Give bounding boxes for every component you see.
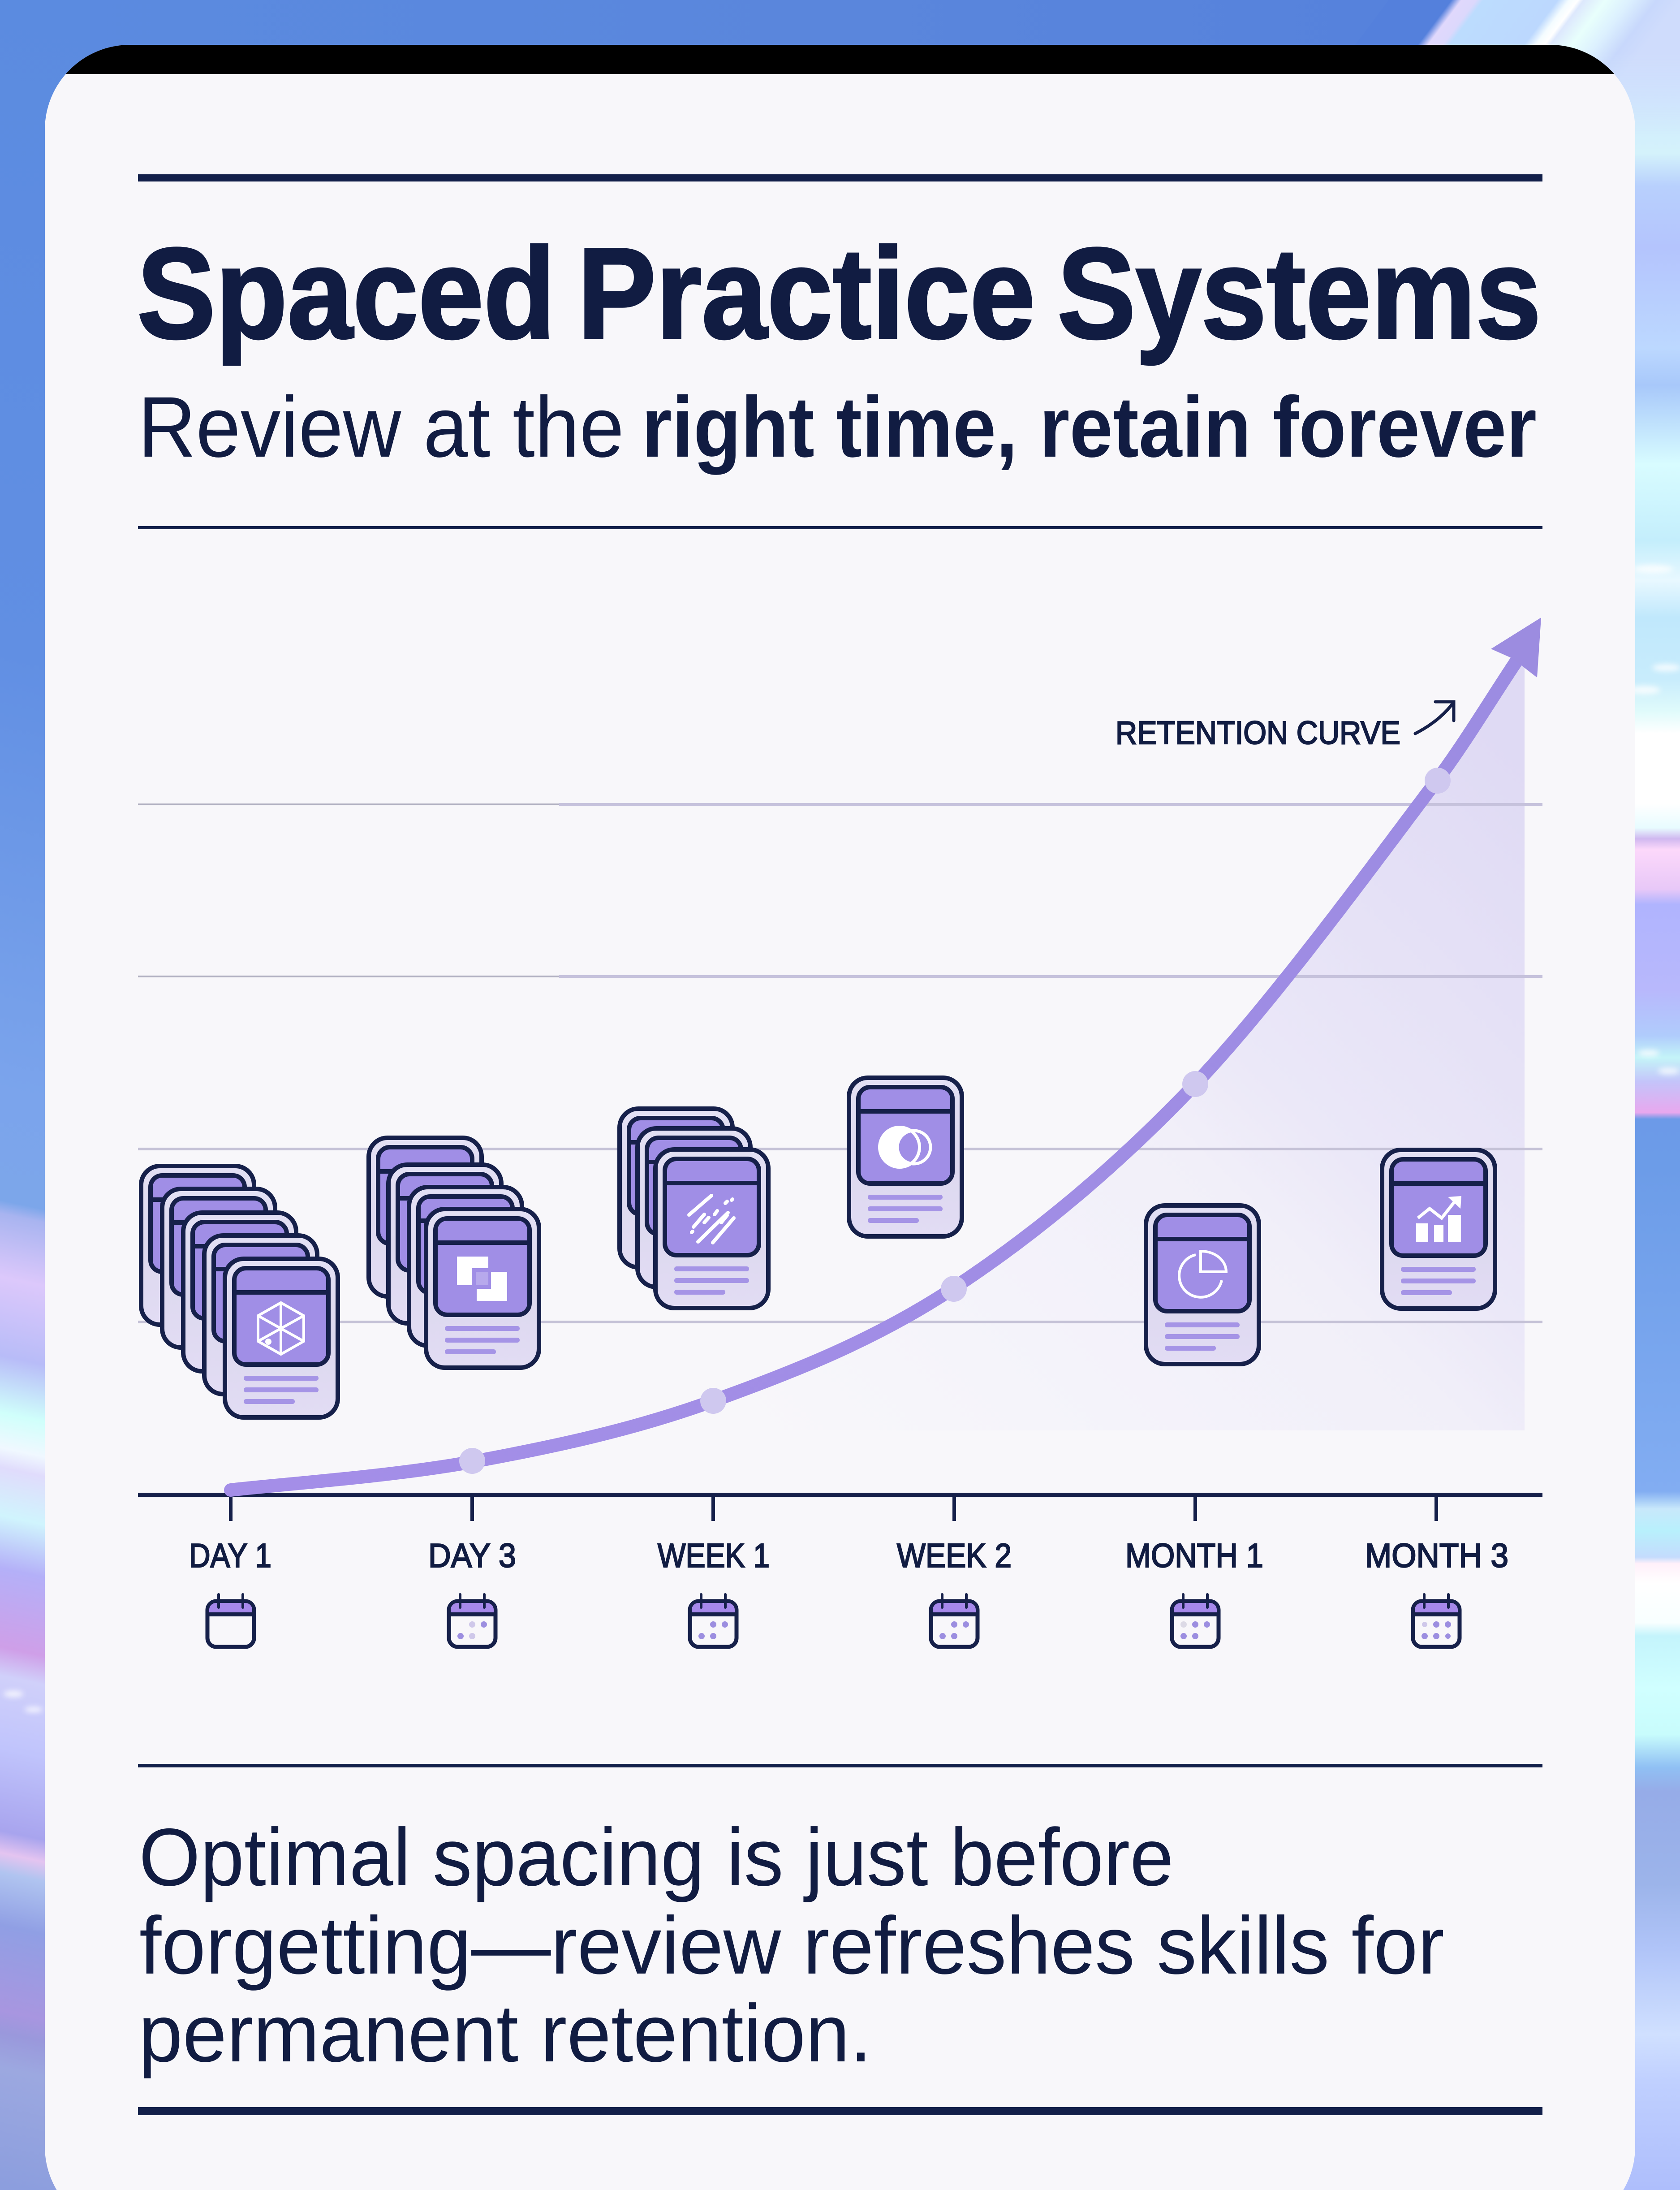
icon: calendar week 2 bbox=[931, 1594, 978, 1647]
icon: small label arrow bbox=[1415, 702, 1454, 734]
icon: calendar month 1 bbox=[1172, 1594, 1219, 1647]
card stack: week 1 bbox=[620, 1109, 768, 1308]
axis label: week 1: WEEK 1 bbox=[658, 1537, 770, 1574]
retention chart bbox=[138, 618, 1542, 1521]
icon: calendar day 1 bbox=[207, 1594, 254, 1647]
top rule bbox=[138, 174, 1542, 181]
footer top rule bbox=[138, 1764, 1542, 1767]
axis label: day 3: DAY 3 bbox=[428, 1537, 516, 1574]
axis label: week 2: WEEK 2 bbox=[897, 1537, 1012, 1574]
takeaway text: permanent retention. bbox=[138, 1987, 872, 2079]
card stack: day 3 bbox=[369, 1138, 539, 1368]
subtitle bbox=[138, 379, 1537, 475]
title: Spaced Practice Systems bbox=[137, 221, 1541, 366]
x axis bbox=[138, 1493, 1542, 1497]
subtitle: Review at the bbox=[138, 379, 624, 475]
card: week 2 bbox=[849, 1078, 962, 1236]
icon: overlapping squares bbox=[457, 1257, 507, 1301]
card stack: day 1 bbox=[141, 1166, 338, 1417]
curve markers bbox=[459, 768, 1451, 1474]
curve arrowhead bbox=[1491, 618, 1541, 678]
grid lines bbox=[138, 803, 1542, 1323]
footer bottom rule bbox=[138, 2107, 1542, 2115]
axis label: day 1: DAY 1 bbox=[189, 1537, 271, 1574]
takeaway text: Optimal spacing is just before bbox=[139, 1811, 1174, 1903]
shaded area under curve bbox=[1168, 665, 1525, 1430]
header rule bbox=[138, 526, 1542, 529]
retention curve label: RETENTION CURVE bbox=[1116, 715, 1400, 751]
axis ticks bbox=[231, 1495, 1436, 1521]
subtitle: right time, retain forever bbox=[642, 379, 1537, 475]
retention curve bbox=[231, 661, 1516, 1490]
takeaway text: forgetting—review refreshes skills for bbox=[139, 1900, 1444, 1991]
icon: hexagonal cube bbox=[258, 1303, 304, 1354]
icon: calendar month 3 bbox=[1413, 1594, 1460, 1647]
icon: diagonal streaks bbox=[689, 1196, 734, 1243]
icon: calendar day 3 bbox=[449, 1594, 495, 1647]
icon: calendar week 1 bbox=[690, 1594, 737, 1647]
axis label: month 1: MONTH 1 bbox=[1125, 1537, 1263, 1574]
icon: overlapping circles bbox=[878, 1126, 930, 1169]
icon: growth chart bbox=[1416, 1196, 1461, 1242]
axis label: month 3: MONTH 3 bbox=[1365, 1537, 1508, 1574]
icon: pie chart bbox=[1179, 1251, 1226, 1297]
takeaway text bbox=[138, 1811, 1444, 2079]
card: month 1 bbox=[1146, 1205, 1259, 1364]
card: month 3 bbox=[1382, 1150, 1495, 1309]
